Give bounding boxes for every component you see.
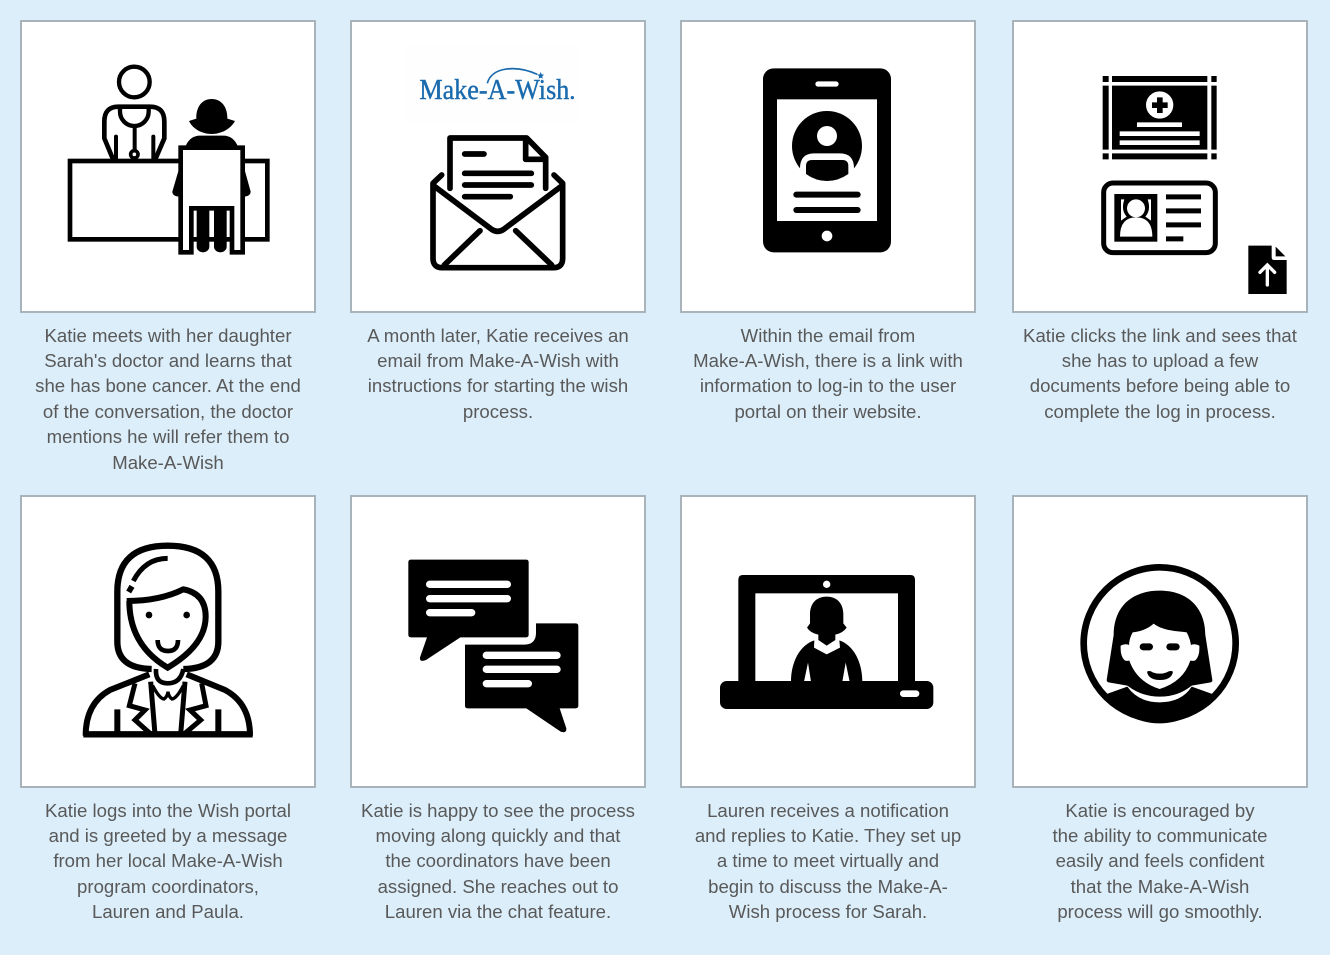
caption: document upload: documents before being able to xyxy=(1030,375,1290,396)
caption: email from Make-A-Wish: email from Make-A-Wish with xyxy=(377,350,619,371)
caption: wish portal greeting: Lauren and Paula. xyxy=(92,901,244,922)
caption: wish portal greeting: Katie logs into the Wish portal xyxy=(45,800,291,820)
caption: wish portal greeting: and is greeted by a message xyxy=(49,825,287,846)
caption: wish portal greeting: program coordinators, xyxy=(77,876,259,897)
caption: user portal link: Make-A-Wish, there is a link with xyxy=(693,350,963,371)
caption: user portal link xyxy=(693,324,963,422)
card: coordinator illustration xyxy=(20,495,316,788)
card: doctor meeting illustration xyxy=(20,20,316,313)
panel: email from Make-A-Wish xyxy=(350,20,646,422)
caption: document upload: complete the log in process. xyxy=(1044,401,1276,422)
icon: open envelope with letter xyxy=(430,135,566,270)
caption: chat feature: Katie is happy to see the process xyxy=(361,800,635,820)
caption: doctor meeting: of the conversation, the doctor xyxy=(43,401,293,422)
panel: wish portal greeting xyxy=(20,495,316,922)
icon: chat bubbles xyxy=(408,560,578,732)
caption: wish portal greeting: from her local Make-A-Wish xyxy=(53,850,283,871)
caption: document upload: she has to upload a few xyxy=(1062,350,1258,371)
caption: virtual meeting: and replies to Katie. They set up xyxy=(695,825,961,846)
icon: medical certificate xyxy=(1103,76,1217,159)
icon: tablet with user profile xyxy=(763,68,891,252)
caption: wish portal greeting xyxy=(45,800,291,922)
caption: email from Make-A-Wish: A month later, Katie receives an xyxy=(367,324,629,346)
icon: smiling woman portrait xyxy=(1080,564,1239,724)
caption: virtual meeting: Wish process for Sarah. xyxy=(729,901,927,922)
caption: email from Make-A-Wish: instructions for starting the wish xyxy=(368,375,628,396)
card: virtual meeting illustration xyxy=(680,495,976,788)
panel: document upload xyxy=(1012,20,1308,422)
panel: user portal link xyxy=(680,20,976,422)
caption: email from Make-A-Wish: process. xyxy=(463,401,533,422)
caption: confident outcome: the ability to communicate xyxy=(1053,825,1267,846)
caption: virtual meeting: begin to discuss the Make-A- xyxy=(708,876,948,897)
icon: file upload xyxy=(1248,246,1287,294)
caption: doctor meeting: Katie meets with her daughter xyxy=(44,324,292,346)
caption: doctor meeting: mentions he will refer them to xyxy=(47,426,289,447)
icon: smiling coordinator xyxy=(82,542,253,738)
card: chat illustration xyxy=(350,495,646,788)
logo: Make-A-Wish: Make-A-Wish xyxy=(419,74,569,106)
panel: virtual meeting xyxy=(680,495,976,922)
caption: chat feature: moving along quickly and that xyxy=(376,825,620,846)
card: confident Katie illustration xyxy=(1012,495,1308,788)
caption: doctor meeting: Sarah's doctor and learns that xyxy=(44,350,292,371)
caption: confident outcome: process will go smoothly. xyxy=(1057,901,1263,922)
icon: doctor and mother at desk xyxy=(68,64,270,255)
caption: chat feature xyxy=(361,800,635,922)
caption: confident outcome: Katie is encouraged by xyxy=(1065,800,1255,820)
icon group: documents to upload xyxy=(1101,76,1287,294)
icon: laptop video call xyxy=(720,575,934,709)
caption: chat feature: the coordinators have been xyxy=(385,850,611,871)
caption: user portal link: information to log-in to the user xyxy=(700,375,956,396)
caption: document upload: Katie clicks the link and sees that xyxy=(1023,324,1297,346)
caption: virtual meeting: a time to meet virtually and xyxy=(717,850,939,871)
caption: doctor meeting: she has bone cancer. At the end xyxy=(35,375,301,396)
panel: chat feature xyxy=(350,495,646,922)
caption: doctor meeting: Make-A-Wish xyxy=(112,452,224,473)
caption: virtual meeting xyxy=(695,800,961,922)
card: portal illustration xyxy=(680,20,976,313)
panel: confident outcome xyxy=(1012,495,1308,922)
panel: doctor meeting xyxy=(20,20,316,473)
caption: chat feature: Lauren via the chat feature. xyxy=(385,901,611,922)
caption: user portal link: portal on their website. xyxy=(734,401,922,422)
caption: user portal link: Within the email from xyxy=(741,324,915,346)
caption: doctor meeting xyxy=(35,324,301,473)
card: email illustration xyxy=(350,20,646,313)
caption: email from Make-A-Wish xyxy=(367,324,629,422)
caption: chat feature: assigned. She reaches out to xyxy=(378,876,618,897)
caption: virtual meeting: Lauren receives a notification xyxy=(707,800,949,820)
caption: confident outcome: that the Make-A-Wish xyxy=(1071,876,1249,897)
icon: ID card xyxy=(1104,183,1215,253)
card: document upload illustration xyxy=(1012,20,1308,313)
caption: confident outcome xyxy=(1052,800,1267,922)
caption: document upload xyxy=(1023,324,1297,422)
caption: confident outcome: easily and feels confident xyxy=(1056,850,1264,871)
